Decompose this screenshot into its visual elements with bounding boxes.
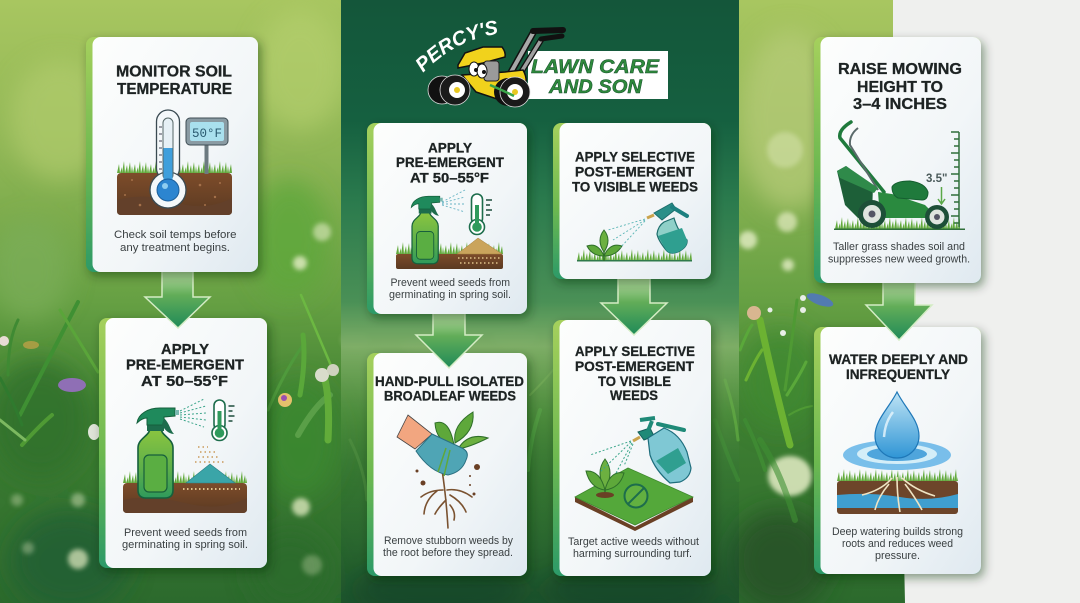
logo: Percy's Lawn Care and Son [428, 30, 668, 107]
icon: sprayer over turf patch [575, 418, 693, 531]
heading: PRE-EMERGENT [126, 358, 244, 374]
heading [116, 64, 232, 98]
body text: Check soil temps before [114, 229, 236, 241]
heading: APPLY [428, 141, 472, 156]
body text: Remove stubborn weeds by [384, 535, 513, 547]
icon: spray bottle and teal granules [123, 399, 247, 513]
body text: suppresses new weed growth. [828, 254, 970, 266]
heading: POST-EMERGENT [575, 164, 694, 180]
heading: WATER DEEPLY AND [829, 351, 968, 367]
logo wordmark [531, 57, 660, 98]
body text [383, 535, 513, 559]
body text [114, 229, 236, 254]
logo wordmark: AND SON [548, 77, 643, 98]
panel: center dark green [341, 0, 739, 603]
logo wordmark box [528, 51, 668, 99]
icon: thermometer in soil with gauge [117, 110, 232, 215]
logo name: PERCY'S: PERCY'S [416, 20, 497, 72]
body text: harming surrounding turf. [573, 548, 692, 560]
card: apply pre-emergent (center) [367, 123, 527, 314]
card: selective post-emergent (bottom) [553, 320, 711, 576]
card: hand-pull weeds [367, 353, 527, 576]
heading: TO VISIBLE WEEDS [572, 179, 698, 195]
panel: right pale background [893, 0, 1080, 603]
body text: the root before they spread. [383, 547, 513, 559]
heading: INFREQUENTLY [846, 366, 951, 382]
logo wordmark: LAWN CARE [531, 57, 660, 78]
heading: TO VISIBLE [598, 373, 671, 389]
heading: MONITOR SOIL [116, 64, 232, 80]
body text [832, 526, 963, 562]
icon: thermometer in soil with gauge: 50°F [192, 127, 222, 141]
icon: water drop, ripples and roots [837, 392, 958, 514]
heading: BROADLEAF WEEDS [384, 388, 516, 404]
body text: Deep watering builds strong [832, 526, 963, 538]
heading [838, 61, 962, 113]
body text: pressure. [875, 550, 920, 562]
body text [122, 527, 248, 551]
icon: lawn mower with height ruler [834, 122, 965, 230]
heading: RAISE MOWING [838, 61, 962, 78]
card: monitor soil temperature [86, 37, 258, 272]
heading: APPLY SELECTIVE [575, 149, 695, 165]
logo mower handles [510, 30, 563, 74]
body text: roots and reduces weed [842, 538, 953, 550]
heading: APPLY SELECTIVE [575, 343, 695, 359]
logo mower body [428, 47, 530, 107]
heading: HAND-PULL ISOLATED [375, 373, 524, 389]
arrow: right column [866, 279, 932, 340]
heading: APPLY [161, 342, 209, 358]
heading: TEMPERATURE [117, 81, 232, 98]
body text: Taller grass shades soil and [833, 241, 965, 253]
heading: PRE-EMERGENT [396, 155, 505, 170]
heading: 3–4 INCHES [853, 96, 947, 113]
body text [568, 536, 699, 560]
card: apply pre-emergent (left) [99, 318, 267, 568]
icon: spray bottle and seed pile [396, 190, 503, 269]
body text: any treatment begins. [120, 242, 230, 254]
heading: POST-EMERGENT [575, 358, 694, 374]
icon: gloved hand pulling weed [397, 412, 488, 528]
heading [375, 373, 524, 404]
arrow: step 1 to 2 [145, 268, 210, 328]
card: water deeply [814, 327, 981, 574]
heading: HEIGHT TO [857, 79, 943, 96]
card: selective post-emergent (top) [553, 123, 711, 279]
body text: Target active weeds without [568, 536, 699, 548]
body text: Prevent weed seeds from [124, 527, 247, 539]
body text: germinating in spring soil. [389, 289, 511, 301]
body text [389, 277, 511, 301]
heading [829, 351, 968, 382]
heading [575, 343, 695, 403]
arrow: center left [416, 310, 482, 368]
heading: WEEDS [610, 387, 658, 403]
heading [126, 342, 244, 390]
arrow: center right [601, 275, 667, 335]
heading [396, 141, 505, 186]
heading [572, 149, 698, 195]
icon: lawn mower with height ruler: 3.5" [926, 173, 947, 185]
body text [828, 241, 970, 266]
icon: sprayer over weed [577, 203, 692, 262]
heading: AT 50–55°F [410, 170, 489, 186]
card: raise mowing height [814, 37, 981, 283]
body text: Prevent weed seeds from [390, 277, 510, 289]
heading: AT 50–55°F [141, 374, 228, 390]
body text: germinating in spring soil. [122, 539, 248, 551]
